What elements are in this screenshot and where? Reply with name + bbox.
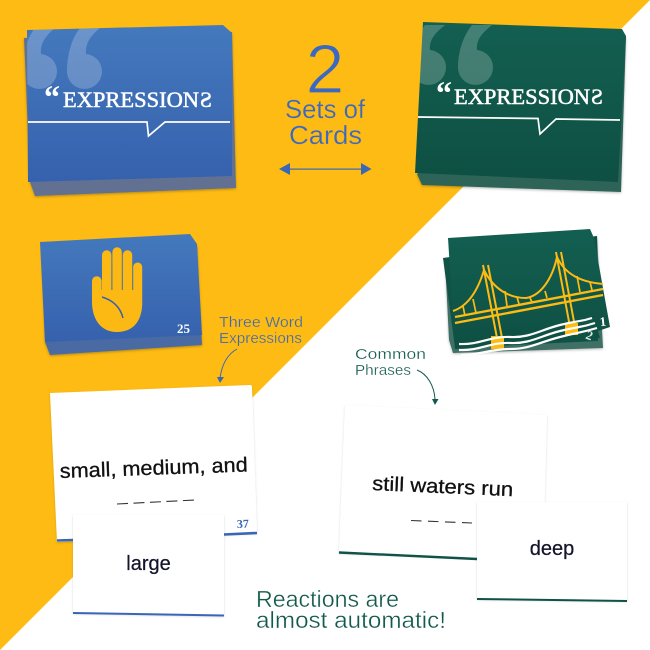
heading: 2 sets of cards: Cards <box>289 120 362 150</box>
icon: raised hand <box>92 247 142 332</box>
green bridge cards: 2 <box>584 327 595 343</box>
green bridge cards <box>443 229 610 355</box>
card text: still waters run <box>372 473 514 501</box>
white card: deep <box>477 502 627 601</box>
double arrow <box>279 163 372 175</box>
label: three word expressions: Expressions <box>219 330 302 347</box>
green expressions card deck <box>411 22 626 192</box>
arrow: common phrases <box>417 370 438 405</box>
white card: small, medium, and <box>50 385 257 542</box>
green card title: S <box>591 84 603 109</box>
label: common phrases: Phrases <box>355 362 411 379</box>
card numbers 1 and 2: 1 <box>599 314 607 329</box>
icon: large quote marks <box>22 28 102 89</box>
card text: large <box>126 553 171 575</box>
label: three word expressions <box>219 314 303 347</box>
caption: reactions are almost automatic: Reactions are <box>256 586 399 612</box>
card number 37: 37 <box>237 517 249 531</box>
heading: 2 sets of cards <box>285 30 366 150</box>
label: common phrases: Common <box>355 346 426 363</box>
blue card title: S <box>200 87 212 112</box>
blank dashes <box>117 500 195 504</box>
water waves <box>459 318 597 355</box>
blue hand card <box>40 234 202 355</box>
icon: large quote marks <box>420 25 493 85</box>
card text: deep <box>530 538 574 560</box>
heading: 2 sets of cards: 2 <box>306 30 344 108</box>
green card title: EXPRESSION <box>454 84 590 109</box>
card number 25: 25 <box>177 321 190 336</box>
card text: small, medium, and <box>59 453 248 483</box>
blank dashes <box>411 520 472 523</box>
label: common phrases <box>355 346 426 379</box>
caption: reactions are almost automatic <box>256 586 446 633</box>
heading: 2 sets of cards: Sets of <box>285 94 366 124</box>
blue card title: “ <box>44 80 60 116</box>
icon: bridge <box>453 252 603 349</box>
blue card title: EXPRESSION <box>63 87 199 112</box>
blue expressions card deck <box>22 25 236 196</box>
green card title <box>436 76 603 112</box>
arrow: three word expressions <box>217 349 237 383</box>
green card title: “ <box>436 76 452 112</box>
blue card title <box>44 80 212 116</box>
white card: still waters run <box>339 405 547 560</box>
label: three word expressions: Three Word <box>219 314 303 331</box>
caption: reactions are almost automatic: almost automatic! <box>256 607 446 633</box>
white card: large <box>73 515 224 616</box>
